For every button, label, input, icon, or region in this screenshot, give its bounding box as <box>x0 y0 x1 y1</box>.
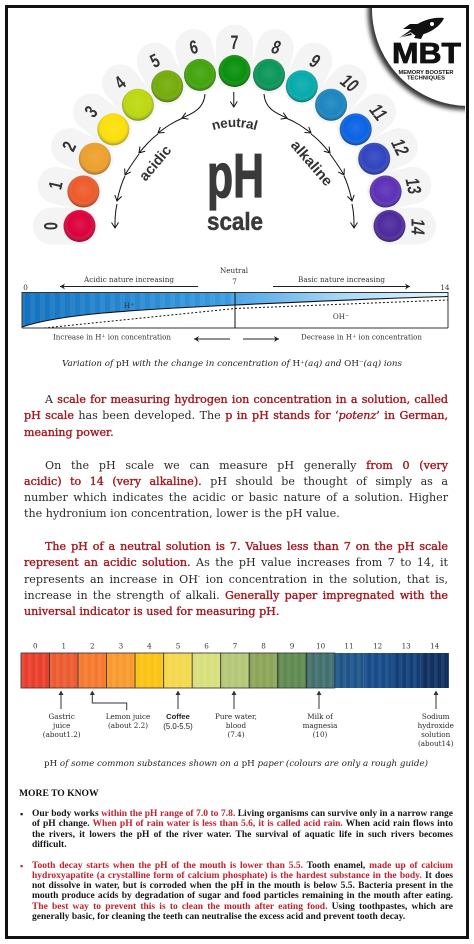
label: acidic: acidic <box>136 143 175 184</box>
caption: spectrum: pH of some common substances shown on a pH paper (colours are only a rough guide) <box>44 758 428 768</box>
icon: rocket <box>399 18 444 39</box>
substance labels: (10) <box>313 730 328 739</box>
label: alkaline: alkaline <box>287 138 335 190</box>
scale numbers: 5 <box>147 50 163 72</box>
logo text: MEMORY BOOSTER <box>398 70 454 76</box>
scale labels: + <box>101 334 106 340</box>
bullet: body pH range: difficult. <box>32 840 67 850</box>
caption: chart: Variation of pH with the change in concentration of H⁺(aq) and OH⁻(aq) ions <box>62 358 402 368</box>
paragraph: neutral solution: The pH of a neutral solution is 7. Values less than 7 on the pH scale <box>45 540 448 553</box>
title: pH scale: pH <box>207 142 264 211</box>
paragraph: pH scale definition <box>24 393 448 439</box>
label: neutral: neutral <box>212 118 258 130</box>
concentration curves <box>22 292 448 328</box>
scale labels: 14 <box>440 283 450 292</box>
spectrum numbers: 8 <box>261 642 266 650</box>
scale labels: ion concentration <box>106 332 171 342</box>
paragraph: measuring pH: acidic) to 14 (very alkaline). pH should be thought of simply as a <box>24 475 448 488</box>
paragraph: neutral solution: increase in the strength of alkali. Generally paper impregnated with the <box>24 589 448 602</box>
scale numbers: 8 <box>268 37 284 59</box>
scale labels: OH <box>333 312 345 321</box>
direction arrows <box>60 286 410 339</box>
scale labels: H <box>124 301 130 310</box>
scale numbers: 13 <box>401 177 426 195</box>
spectrum cells <box>21 653 449 688</box>
scale numbers: 4 <box>110 72 131 94</box>
arrow: alkaline <box>264 94 354 228</box>
title: pH scale <box>207 142 264 236</box>
scale numbers: 14 <box>407 217 428 237</box>
substance labels: hydroxide <box>418 721 454 730</box>
paragraph: measuring pH: the hydronium ion concentration, lower is the pH value. <box>24 507 340 520</box>
spectrum numbers: 3 <box>119 642 124 650</box>
spectrum numbers: 10 <box>316 642 326 650</box>
scale numbers: 0 <box>41 222 62 230</box>
scale labels: 0 <box>23 283 28 292</box>
bullet: body pH range <box>20 809 453 850</box>
paragraph: neutral solution <box>24 540 448 618</box>
scale labels: ion concentration <box>356 332 422 342</box>
paragraph: measuring pH <box>24 458 448 520</box>
bullet: tooth decay: mouth produce acids by degradation of sugar and food particles remaining in the mouth after eating. <box>32 891 453 901</box>
text: ▪ <box>20 809 23 819</box>
spectrum numbers: 11 <box>344 642 354 650</box>
title: pH scale: scale <box>207 208 263 236</box>
spectrum numbers: 9 <box>290 642 295 650</box>
spectrum numbers: 1 <box>62 642 66 650</box>
substance labels: Gastric <box>49 712 75 721</box>
paragraph: neutral solution: represent an acidic solution. As the pH value increases from 7 to 14, it <box>24 556 448 569</box>
substance labels <box>43 712 454 748</box>
scale numbers: 9 <box>305 51 324 72</box>
scale labels: + <box>352 334 356 340</box>
scale numbers: 3 <box>80 102 102 122</box>
capsules <box>52 43 418 226</box>
bullet: body pH range: Our body works within the pH range of 7.0 to 7.8. Living organisms can survive only in a narrow range <box>32 809 453 819</box>
scale numbers: 11 <box>364 101 392 124</box>
bullet: tooth decay: Tooth decay starts when the pH of the mouth is lower than 5.5. Tooth enamel, made up of calcium <box>32 860 453 870</box>
scale numbers: 12 <box>386 137 414 158</box>
substance labels: solution <box>421 730 451 739</box>
substance labels: Coffee <box>166 712 190 721</box>
logo badge <box>368 0 474 110</box>
blue band <box>22 292 448 328</box>
substance labels: juice <box>52 721 70 730</box>
spectrum numbers: 0 <box>33 642 38 650</box>
spectrum numbers <box>33 642 440 650</box>
bullet: body pH range: the rivers, it lowers the pH of the river water. The survival of aquatic life in such rivers becomes <box>32 830 453 840</box>
spectrum numbers: 5 <box>176 642 181 650</box>
substance labels: (5.0-5.5) <box>163 722 193 731</box>
substance labels: (7.4) <box>227 730 245 739</box>
bullet: tooth decay: generally basic, for cleaning the teeth can neutralise the excess acid and prevent tooth decay. <box>32 912 405 922</box>
logo text: TECHNIQUES <box>407 76 446 82</box>
spectrum numbers: 14 <box>430 642 440 650</box>
scale labels: Neutral <box>220 266 249 275</box>
scale numbers: 1 <box>45 179 67 191</box>
spectrum numbers: 6 <box>204 642 209 650</box>
paragraph: measuring pH: On the pH scale we can measure pH generally from 0 (very <box>45 458 448 472</box>
spectrum numbers: 4 <box>147 642 152 650</box>
scale labels: Decrease in H <box>301 332 353 342</box>
scale labels: Increase in H <box>53 332 102 342</box>
logo text <box>394 42 462 80</box>
scale labels: 7 <box>232 277 237 286</box>
pH paper spectrum <box>21 642 454 748</box>
paragraph: neutral solution: represents an increase in OH- ion concentration in the solution, that is, <box>24 572 448 586</box>
scale labels: Acidic nature increasing <box>83 275 174 284</box>
chart: H+ and OH- concentration bar <box>22 266 450 342</box>
substance labels: (about14) <box>418 739 454 748</box>
scale numbers: 7 <box>231 32 238 54</box>
substance labels: Sodium <box>422 712 450 721</box>
substance labels: Milk of <box>307 712 334 721</box>
scale labels <box>23 266 450 342</box>
arrow: neutral <box>233 92 235 107</box>
paragraph: pH scale definition: A scale for measuring hydrogen ion concentration in a solution, called <box>45 393 448 406</box>
substance labels: (about 2.2) <box>108 721 148 730</box>
bullet: tooth decay: not dissolve in water, but is corroded when the pH in the mouth is below 5.5. Bacteria present in the <box>32 881 453 891</box>
bullet: tooth decay: hydroxyapatite (a crystalline form of calcium phosphate) is the hardest substance in the body. It does <box>32 871 453 881</box>
paragraph: neutral solution: universal indicator is used for measuring pH. <box>24 605 279 618</box>
substance labels: magnesia <box>303 721 338 730</box>
scale numbers <box>41 32 428 237</box>
spectrum numbers: 2 <box>90 642 95 650</box>
text: ▪ <box>20 860 23 870</box>
spectrum numbers: 12 <box>373 642 382 650</box>
arrow: acidic <box>115 94 205 228</box>
bullet: tooth decay <box>20 860 453 922</box>
bullet: tooth decay: The best way to prevent this is to clean the mouth after eating food. Using toothpastes, which are <box>32 902 453 912</box>
paragraph: measuring pH: number which indicates the acidic or basic nature of a solution. Higher <box>24 491 448 504</box>
substance labels: (about1.2) <box>43 730 81 739</box>
paragraph: pH scale definition: meaning power. <box>24 426 114 439</box>
spectrum numbers: 7 <box>233 642 238 650</box>
scale labels: Basic nature increasing <box>298 275 385 284</box>
substance labels: blood <box>226 721 246 730</box>
logo text: MBT <box>392 38 461 70</box>
paragraph: pH scale definition: pH scale has been developed. The p in pH stands for ‘potenz’ in German, <box>24 409 448 422</box>
scale numbers: 2 <box>58 138 81 155</box>
coloured balls <box>64 55 406 242</box>
bullet: body pH range: of pH change. When pH of rain water is less than 5.6, it is called acid rain. When acid rain flows into <box>32 819 453 829</box>
scale labels: + <box>130 302 134 308</box>
substance arrows <box>58 690 438 710</box>
pH scale arc <box>41 32 428 242</box>
substance labels: Pure water, <box>215 712 257 721</box>
substance labels: Lemon juice <box>106 712 150 721</box>
scale numbers: 10 <box>335 71 363 96</box>
spectrum numbers: 13 <box>402 642 411 650</box>
scale labels: − <box>345 313 349 319</box>
heading: more to know: MORE TO KNOW <box>19 788 99 799</box>
scale numbers: 6 <box>187 36 200 59</box>
